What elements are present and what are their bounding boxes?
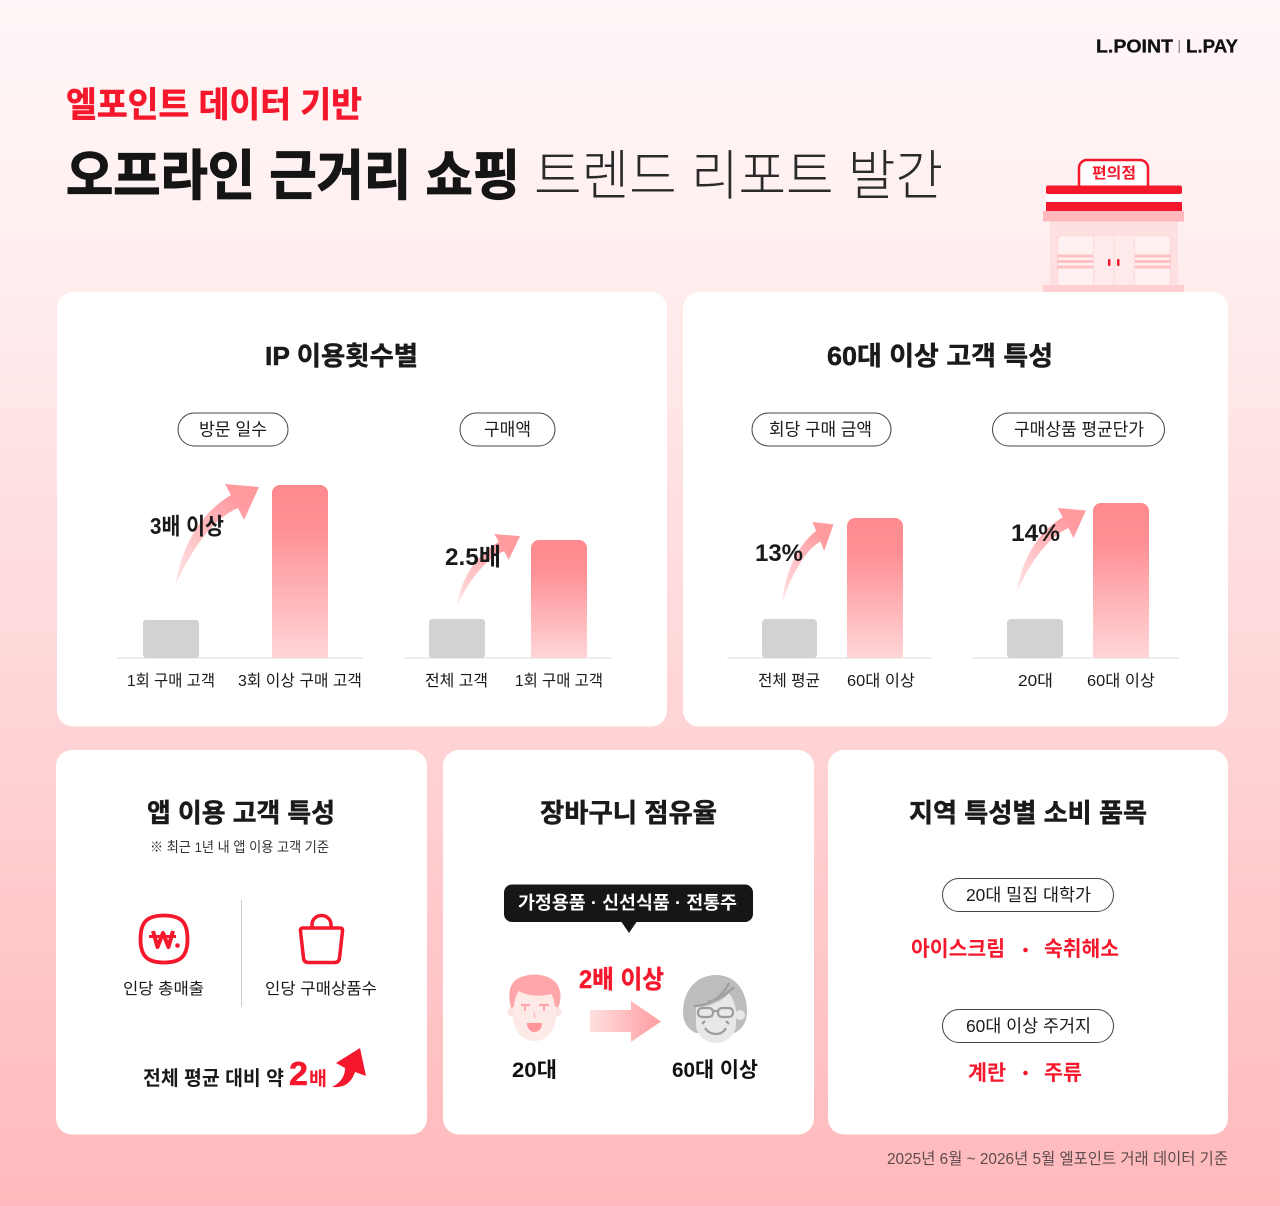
chart: 회당 구매 금액 bars <box>727 518 932 690</box>
items: 아이스크림 · 숙취해소: 아이스크림 <box>911 938 1005 961</box>
icon: shopping bag <box>300 916 343 962</box>
panel: 장바구니 점유율 <box>443 750 814 1134</box>
title <box>66 146 943 206</box>
chart: 방문 일수 bars: 1회 구매 고객 <box>127 672 215 690</box>
callout: 전체 평균 대비 약 2배: 2 <box>289 1055 308 1092</box>
callout: 품목 bubble <box>504 884 753 933</box>
logo: L.POINT | L.PAY: L.PAY <box>1186 36 1239 56</box>
callout: 전체 평균 대비 약 2배: 배 <box>309 1068 327 1090</box>
pill: 구매액: 구매액 <box>484 420 531 440</box>
footnote: data source: 2025년 6월 ~ 2026년 5월 엘포인트 거래 데이터 기준 <box>887 1150 1228 1168</box>
pill: 구매액 <box>460 413 555 446</box>
pill: 회당 구매 금액: 회당 구매 금액 <box>769 420 872 440</box>
panel: 앱 이용 고객 특성 <box>56 750 427 1134</box>
label: 인당 총매출: 인당 총매출 <box>123 980 204 998</box>
pill: 방문 일수: 방문 일수 <box>199 420 267 440</box>
pill: 20대 밀집 대학가: 20대 밀집 대학가 <box>966 885 1091 905</box>
chart: 구매액 bars: 2.5배 <box>445 544 501 571</box>
icon: won coin <box>140 916 188 962</box>
chart: 구매액 bars: 1회 구매 고객 <box>515 672 603 690</box>
icon: convenience store: 편의점 <box>1092 165 1136 182</box>
chart: 방문 일수 bars: 3회 이상 구매 고객 <box>238 672 362 690</box>
chart: 회당 구매 금액 bars: 60대 이상 <box>847 672 915 690</box>
pill: 20대 밀집 대학가 <box>942 878 1114 912</box>
chart: 방문 일수 bars: 3배 이상 <box>150 513 224 539</box>
subtitle: 엘포인트 데이터 기반 <box>66 86 362 125</box>
callout: 품목 bubble: 가정용품 · 신선식품 · 전통주 <box>518 893 737 913</box>
icon: convenience store <box>1043 160 1184 292</box>
chart: 방문 일수 bars <box>117 484 363 690</box>
chart: 회당 구매 금액 bars: 13% <box>755 540 803 567</box>
pill: 구매상품 평균단가: 구매상품 평균단가 <box>1014 420 1144 440</box>
logo: L.POINT | L.PAY: L.POINT <box>1096 36 1174 56</box>
items: 아이스크림 · 숙취해소: 숙취해소 <box>1044 938 1119 961</box>
chart: 구매상품 평균단가 bars: 14% <box>1011 520 1060 547</box>
heading: IP 이용횟수별: IP 이용횟수별 <box>265 341 418 371</box>
chart: 구매액 bars <box>404 534 612 690</box>
pill: 회당 구매 금액 <box>752 413 891 446</box>
icon: red arrow <box>332 1048 366 1087</box>
panel: 지역 특성별 소비 품목 <box>828 750 1228 1134</box>
callout: 전체 평균 대비 약 2배: 전체 평균 대비 약 <box>143 1067 284 1090</box>
chart: 구매액 bars: 전체 고객 <box>425 672 488 690</box>
heading: 장바구니 점유율: 장바구니 점유율 <box>540 798 717 828</box>
items: 계란 · 주류: 주류 <box>1044 1062 1082 1085</box>
items: 아이스크림 · 숙취해소 <box>911 938 1119 961</box>
heading: 지역 특성별 소비 품목: 지역 특성별 소비 품목 <box>909 798 1147 828</box>
arrow: gradient right <box>590 1001 661 1042</box>
panel: IP 이용횟수별 <box>57 292 667 726</box>
chart: 구매상품 평균단가 bars <box>972 503 1179 690</box>
note: 기준: ※ 최근 1년 내 앱 이용 고객 기준 <box>150 839 329 855</box>
heading: 60대 이상 고객 특성: 60대 이상 고객 특성 <box>827 341 1053 371</box>
label: 인당 구매상품수: 인당 구매상품수 <box>265 980 377 998</box>
title: 오프라인 근거리 쇼핑 <box>66 146 520 206</box>
chart: 구매상품 평균단가 bars: 20대 <box>1018 672 1053 690</box>
icon: young man face <box>508 975 562 1041</box>
items: 계란 · 주류 <box>968 1062 1082 1085</box>
pill: 구매상품 평균단가 <box>992 413 1164 446</box>
callout: 전체 평균 대비 약 2배 <box>143 1048 366 1092</box>
panel: 60대 이상 고객 특성 <box>683 292 1228 726</box>
pill: 60대 이상 주거지: 60대 이상 주거지 <box>966 1016 1091 1036</box>
label: 60대 이상: 60대 이상 <box>672 1059 758 1082</box>
label: 2배 이상: 2배 이상 <box>579 966 664 994</box>
pill: 방문 일수 <box>178 413 288 446</box>
title: 트렌드 리포트 발간 <box>534 146 943 206</box>
chart: 회당 구매 금액 bars: 전체 평균 <box>758 672 820 690</box>
pill: 60대 이상 주거지 <box>942 1010 1114 1042</box>
logo: L.POINT | L.PAY <box>1096 36 1239 56</box>
items: 계란 · 주류: 계란 <box>968 1062 1006 1085</box>
icon: elderly woman face <box>683 975 747 1043</box>
heading: 앱 이용 고객 특성: 앱 이용 고객 특성 <box>147 798 335 828</box>
chart: 구매상품 평균단가 bars: 60대 이상 <box>1087 672 1155 690</box>
label: 20대: 20대 <box>512 1059 557 1082</box>
